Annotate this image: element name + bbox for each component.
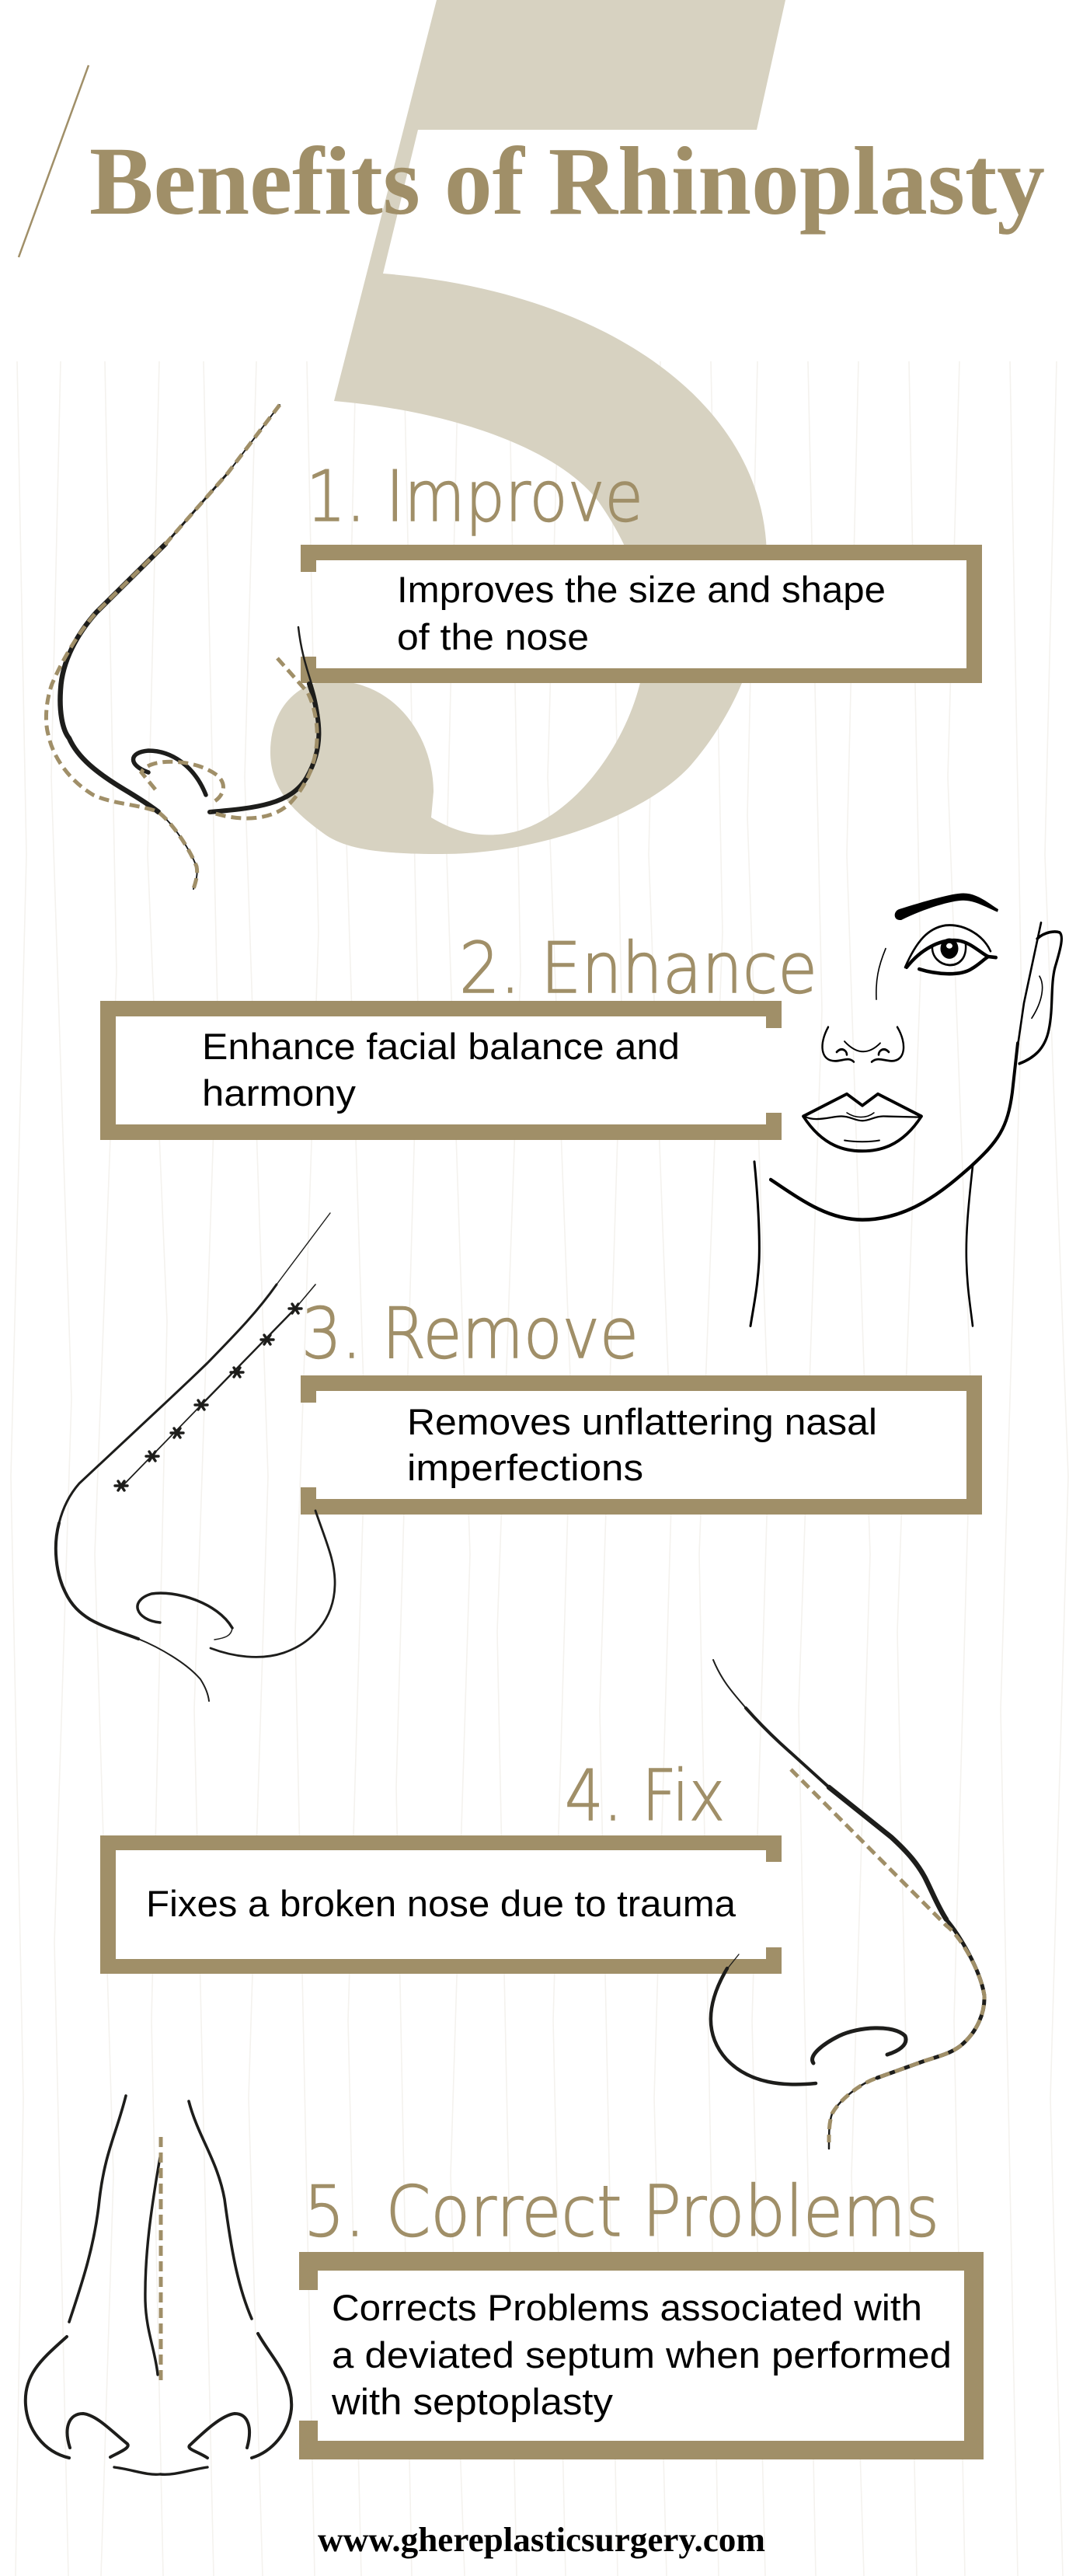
eyebrow	[895, 894, 998, 920]
text: enhance description: Enhance facial balance and	[202, 1026, 680, 1067]
panel: 3. Remove	[301, 1293, 982, 1515]
text: remove description: Removes unflattering nasal	[407, 1401, 877, 1442]
text: enhance description	[202, 1026, 680, 1114]
panel: 2. Enhance	[100, 928, 817, 1140]
lips	[803, 1094, 921, 1151]
heading: 5. Correct Problems: 5. Correct Problems	[304, 2171, 939, 2253]
panel: 5. Correct Problems	[299, 2171, 984, 2459]
brow-to-nose line	[876, 949, 886, 999]
icon: nose profile with dashed correction	[46, 405, 319, 889]
text: improve description	[397, 569, 886, 657]
heading: 3. Remove: 3. Remove	[301, 1293, 639, 1375]
text: remove description: imperfections	[407, 1447, 643, 1488]
box: remove	[301, 1375, 982, 1515]
text: correct problems description	[331, 2287, 952, 2422]
heading: 2. Enhance: 2. Enhance	[459, 928, 817, 1009]
stitches	[115, 1285, 315, 1490]
icon: nose with stitches	[56, 1213, 335, 1701]
large numeral 5	[270, 0, 785, 854]
box: improve	[301, 545, 982, 683]
heading: 4. Fix: 4. Fix	[565, 1755, 725, 1837]
icon: nose profile with dashed straight bridge	[711, 1660, 984, 2149]
icon: nose front view	[26, 2096, 291, 2474]
icon: face line drawing	[750, 894, 1061, 1326]
eye	[905, 925, 996, 974]
text: correct problems description: with septoplasty	[331, 2381, 614, 2422]
box: fix	[100, 1835, 782, 1974]
text: correct problems description: a deviated septum when performed	[332, 2334, 952, 2376]
footer: website: www.ghereplasticsurgery.com	[318, 2521, 765, 2559]
text: correct problems description: Corrects Problems associated with	[332, 2287, 922, 2328]
box: enhance	[100, 1001, 782, 1140]
text: improve description: Improves the size and shape	[397, 569, 886, 610]
neck lines	[750, 1162, 759, 1326]
text: improve description: of the nose	[397, 616, 589, 657]
panel: 4. Fix	[100, 1755, 782, 1974]
nose	[823, 1027, 904, 1061]
ear	[1019, 932, 1061, 1064]
decorative slash	[19, 65, 89, 257]
text: fix description: Fixes a broken nose due to trauma	[146, 1883, 737, 1924]
panel: 1. Improve	[301, 456, 982, 683]
box: correct problems	[299, 2252, 984, 2459]
text: remove description	[407, 1401, 877, 1488]
text: enhance description: harmony	[202, 1072, 357, 1114]
jaw and cheek	[771, 1043, 1018, 1220]
title: Benefits of Rhinoplasty	[89, 128, 1045, 235]
heading: 1. Improve: 1. Improve	[306, 456, 643, 538]
